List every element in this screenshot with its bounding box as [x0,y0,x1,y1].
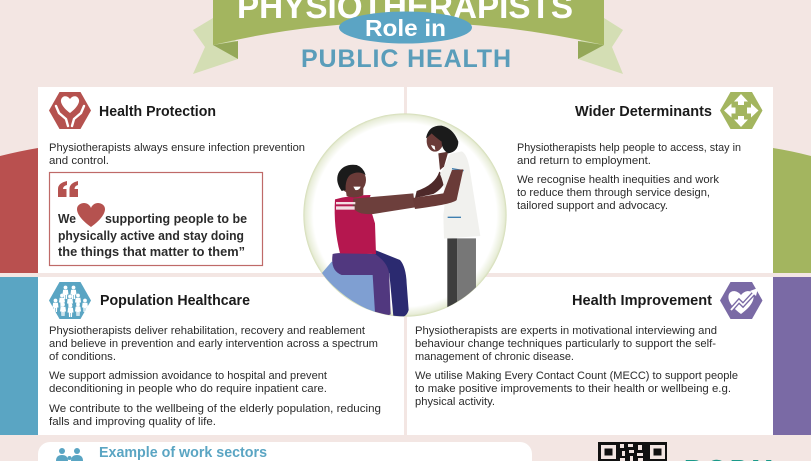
panel: wider determinants [407,87,773,273]
body text: behaviour change techniques particularly to support the self- [415,338,716,350]
ribbon right fold [578,41,604,59]
heading: Wider Determinants [575,104,712,120]
heading: Health Improvement [572,293,712,309]
icon: group of people [56,448,83,461]
panel background [38,442,532,461]
side band: blue [0,277,38,435]
heading: Health Protection [99,104,216,120]
body text: We recognise health inequities and work [517,174,719,186]
body text: Physiotherapists always ensure infection prevention [49,142,305,154]
body text: of conditions. [49,351,116,363]
ribbon left tail [193,18,238,74]
body text: to make positive improvements to their health or wellbeing e.g. [415,383,731,395]
physiotherapist front arm [413,169,463,209]
quote text: We [58,212,76,226]
body text: tailored support and advocacy. [517,200,668,212]
quote text: the things that matter to them” [58,245,245,259]
icon: heart with rising arrow [720,282,762,319]
tunic pocket and trim [448,169,464,217]
body text: and control. [49,155,109,167]
body text: Physiotherapists deliver rehabilitation, recovery and reablement [49,325,366,337]
ribbon right tail [578,18,623,74]
panel: health improvement [407,277,773,435]
body text: We utilise Making Every Contact Count (MECC) to support people [415,370,738,382]
body text: management of chronic disease. [415,351,574,363]
callout: quote [50,172,262,266]
patient arm [353,193,415,214]
body text: Physiotherapists are experts in motivational interviewing and [415,325,717,337]
icon: heart [77,203,105,227]
icon: heart in hands [49,92,91,129]
heading: Example of work sectors [99,445,267,461]
illustration: physiotherapist with patient on exercise ball [303,113,507,317]
quote frame [50,172,262,266]
body text: physical activity. [415,396,495,408]
body text: deconditioning in people who do require inpatient care. [49,383,327,395]
circle backdrop [303,113,507,317]
title: role in: Role in [365,15,446,41]
side band: red [0,148,38,273]
physiotherapist tunic [440,151,480,239]
physiotherapist head [426,126,458,170]
quote marks [58,181,78,197]
body text [517,142,741,212]
sleeve stripes [336,202,355,210]
body text: and return to employment. [517,155,651,167]
panel: population healthcare [38,277,404,435]
body text: and believe in prevention and early intervention across a spectrum [49,338,378,350]
exercise ball [322,262,375,312]
body text: falls and improving quality of life. [49,416,216,428]
quote text: supporting people to be [105,212,247,226]
panel: health protection [38,87,404,273]
icon: crowd of people [49,282,91,319]
panel background [407,87,773,273]
body text [49,142,305,167]
panel: example of work sectors [38,442,532,461]
patient trousers [332,250,409,317]
patient shirt [335,195,376,254]
side band: green [773,148,811,273]
body text [415,325,738,408]
body text [49,325,381,428]
patient head [337,165,366,197]
QR code [598,442,667,461]
heading: Population Healthcare [100,293,250,309]
panel background [38,277,404,435]
panel background [38,87,404,273]
body text: We contribute to the wellbeing of the elderly population, reducing [49,403,381,415]
icon: four arrows [720,92,762,129]
quote text: physically active and stay doing [58,229,244,243]
physiotherapist back arm [415,172,447,198]
body text: We support admission avoidance to hospital and prevent [49,370,328,382]
side band: purple [773,277,811,435]
title: public health: PUBLIC HEALTH [301,45,511,73]
ribbon body [213,0,604,45]
ribbon left fold [213,41,238,59]
quote text [58,212,247,259]
ellipse behind subtitle [339,12,472,44]
body text: to reduce them through service design, [517,187,710,199]
body text: Physiotherapists help people to access, stay in [517,142,741,154]
panel background [407,277,773,435]
physiotherapist trousers [447,238,476,308]
title banner [193,0,623,74]
